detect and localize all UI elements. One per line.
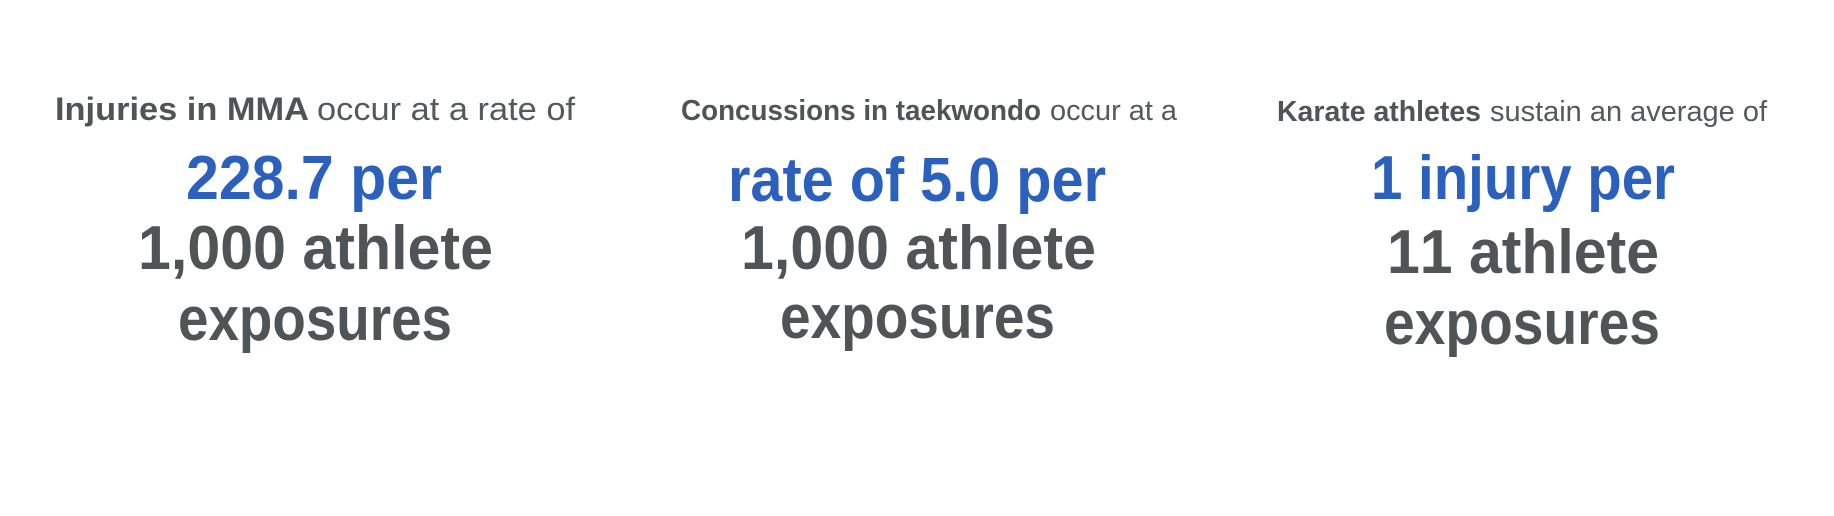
panel: taekwondo concussions [681, 95, 1178, 352]
stat line: exposures: exposures [178, 285, 452, 354]
panel: MMA injuries [55, 91, 575, 354]
stat line: 1,000 athlete: 1,000 athlete [741, 214, 1096, 283]
intro text: taekwondo: Concussions in taekwondo [681, 95, 1041, 127]
intro text: taekwondo: occur at a [1050, 95, 1178, 127]
highlighted stat: rate of 5.0 per: rate of 5.0 per [728, 146, 1106, 215]
intro text: karate: sustain an average of [1490, 96, 1768, 128]
stat line: 11 athlete: 11 athlete [1387, 218, 1659, 287]
intro text: karate [1277, 96, 1768, 128]
highlighted stat: 1 injury per: 1 injury per [1371, 144, 1675, 213]
intro text: MMA: occur at a rate of [317, 91, 575, 127]
highlighted stat: 228.7 per: 228.7 per [186, 144, 442, 213]
panel: karate injuries [1277, 96, 1768, 358]
intro text: MMA: Injuries in MMA [55, 91, 309, 127]
stat line: exposures: exposures [780, 283, 1055, 352]
stat line: 1,000 athlete: 1,000 athlete [138, 214, 493, 283]
intro text: karate: Karate athletes [1277, 96, 1481, 128]
stat line: exposures: exposures [1384, 289, 1660, 358]
intro text: MMA [55, 91, 575, 127]
